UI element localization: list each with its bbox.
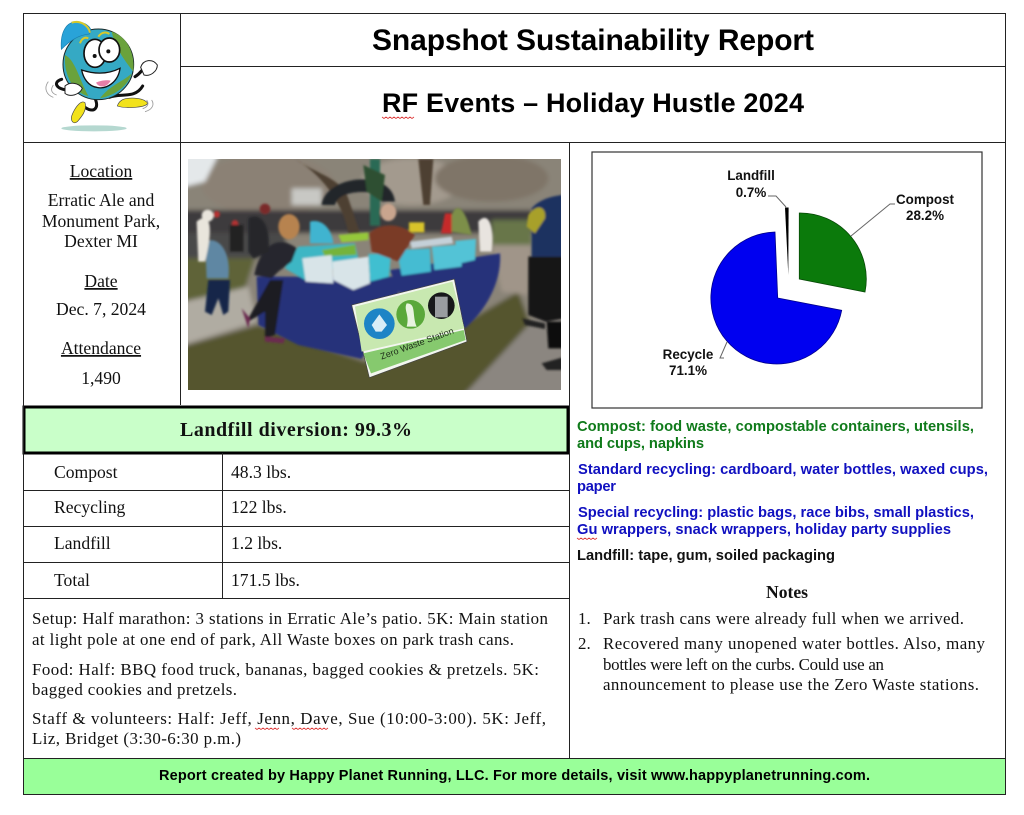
notes heading: Notes xyxy=(766,582,808,602)
label: recycle: Recycle xyxy=(663,347,713,362)
label: recycle value: 71.1% xyxy=(669,363,707,378)
notes list: 1. xyxy=(578,609,591,628)
legend: special recycling items: Gu wrappers, snack wrappers, holiday party supplies xyxy=(577,522,951,538)
text block: setup, food, staff: Staff & volunteers: Half: Jeff, Jenn, Dave, Sue (10:00-3:00). 5K: Jeff, xyxy=(32,709,546,728)
notes list: bottles were left on the curbs. Could use an xyxy=(603,655,885,674)
table: waste weights: 171.5 lbs. xyxy=(231,570,300,590)
text block: setup, food, staff: bagged cookies and pretzels. xyxy=(32,680,237,699)
legend: landfill items: Landfill: tape, gum, soiled packaging xyxy=(577,548,835,564)
subtitle: RF Events – Holiday Hustle 2024 xyxy=(382,88,804,118)
photo: zero waste station at the event: Zero Waste Station xyxy=(379,326,455,362)
notes list: announcement to please use the Zero Waste stations. xyxy=(603,675,979,694)
legend: standard recycling items: paper xyxy=(577,479,616,495)
table: waste weights: 1.2 lbs. xyxy=(231,533,282,553)
table: waste weights xyxy=(54,462,300,590)
event details: location, date, attendance xyxy=(42,161,160,388)
event details: location, date, attendance: 1,490 xyxy=(81,368,121,388)
slice: landfill xyxy=(785,208,789,275)
label: compost value: 28.2% xyxy=(906,208,944,223)
table: waste weights: Compost xyxy=(54,462,118,482)
legend: compost items: and cups, napkins xyxy=(577,436,704,452)
label: landfill value: 0.7% xyxy=(736,185,766,200)
pie chart: waste breakdown xyxy=(592,152,982,408)
table: waste weights: 122 lbs. xyxy=(231,497,287,517)
event details: location, date, attendance: Location xyxy=(70,161,132,181)
footer bar: Report created by Happy Planet Running, LLC. For more details, visit www.happyplanetrunning.com. xyxy=(159,768,870,784)
text block: setup, food, staff: Setup: Half marathon: 3 stations in Erratic Ale’s patio. 5K: Main station xyxy=(32,609,549,628)
event details: location, date, attendance: Dexter MI xyxy=(64,231,138,251)
legend: special recycling items xyxy=(577,505,974,540)
notes list: 2. xyxy=(578,634,591,653)
slice: recycle xyxy=(711,232,842,364)
event details: location, date, attendance: Monument Park, xyxy=(42,211,160,231)
legend: compost items xyxy=(577,419,974,452)
table: waste weights: Recycling xyxy=(54,497,126,517)
event details: location, date, attendance: Attendance xyxy=(61,338,141,358)
label: landfill: Landfill xyxy=(727,168,775,183)
legend: standard recycling items: Standard recycling: cardboard, water bottles, waxed cups, xyxy=(578,462,988,478)
legend: standard recycling items xyxy=(577,462,988,495)
diversion banner xyxy=(24,407,568,453)
logo: running earth mascot xyxy=(46,22,157,131)
text block: setup, food, staff xyxy=(32,609,549,748)
text block: setup, food, staff: at light pole at one end of park, All Waste boxes on park trash cans. xyxy=(32,630,514,649)
table: waste weights: Landfill xyxy=(54,533,111,553)
notes list: Recovered many unopened water bottles. Also, many xyxy=(603,634,986,653)
text block: setup, food, staff: Liz, Bridget (3:30-6:30 p.m.) xyxy=(32,729,241,748)
legend: special recycling items: Special recycling: plastic bags, race bibs, small plastics, xyxy=(578,505,974,521)
text block: setup, food, staff: Food: Half: BBQ food truck, bananas, bagged cookies & pretzels. 5K: xyxy=(32,660,539,679)
event details: location, date, attendance: Erratic Ale and xyxy=(48,190,154,210)
legend: compost items: Compost: food waste, compostable containers, utensils, xyxy=(577,419,974,435)
table: waste weights: 48.3 lbs. xyxy=(231,462,291,482)
table: waste weights: Total xyxy=(54,570,90,590)
notes list: Park trash cans were already full when we arrived. xyxy=(603,609,964,628)
event details: location, date, attendance: Dec. 7, 2024 xyxy=(56,299,146,319)
slice: compost xyxy=(799,213,866,292)
photo: zero waste station at the event xyxy=(188,159,561,390)
label: compost: Compost xyxy=(896,192,955,207)
footer bar xyxy=(24,759,1006,795)
notes list xyxy=(578,609,986,694)
event details: location, date, attendance: Date xyxy=(84,271,118,291)
title: Snapshot Sustainability Report xyxy=(372,24,814,57)
diversion banner: Landfill diversion: 99.3% xyxy=(180,419,412,441)
